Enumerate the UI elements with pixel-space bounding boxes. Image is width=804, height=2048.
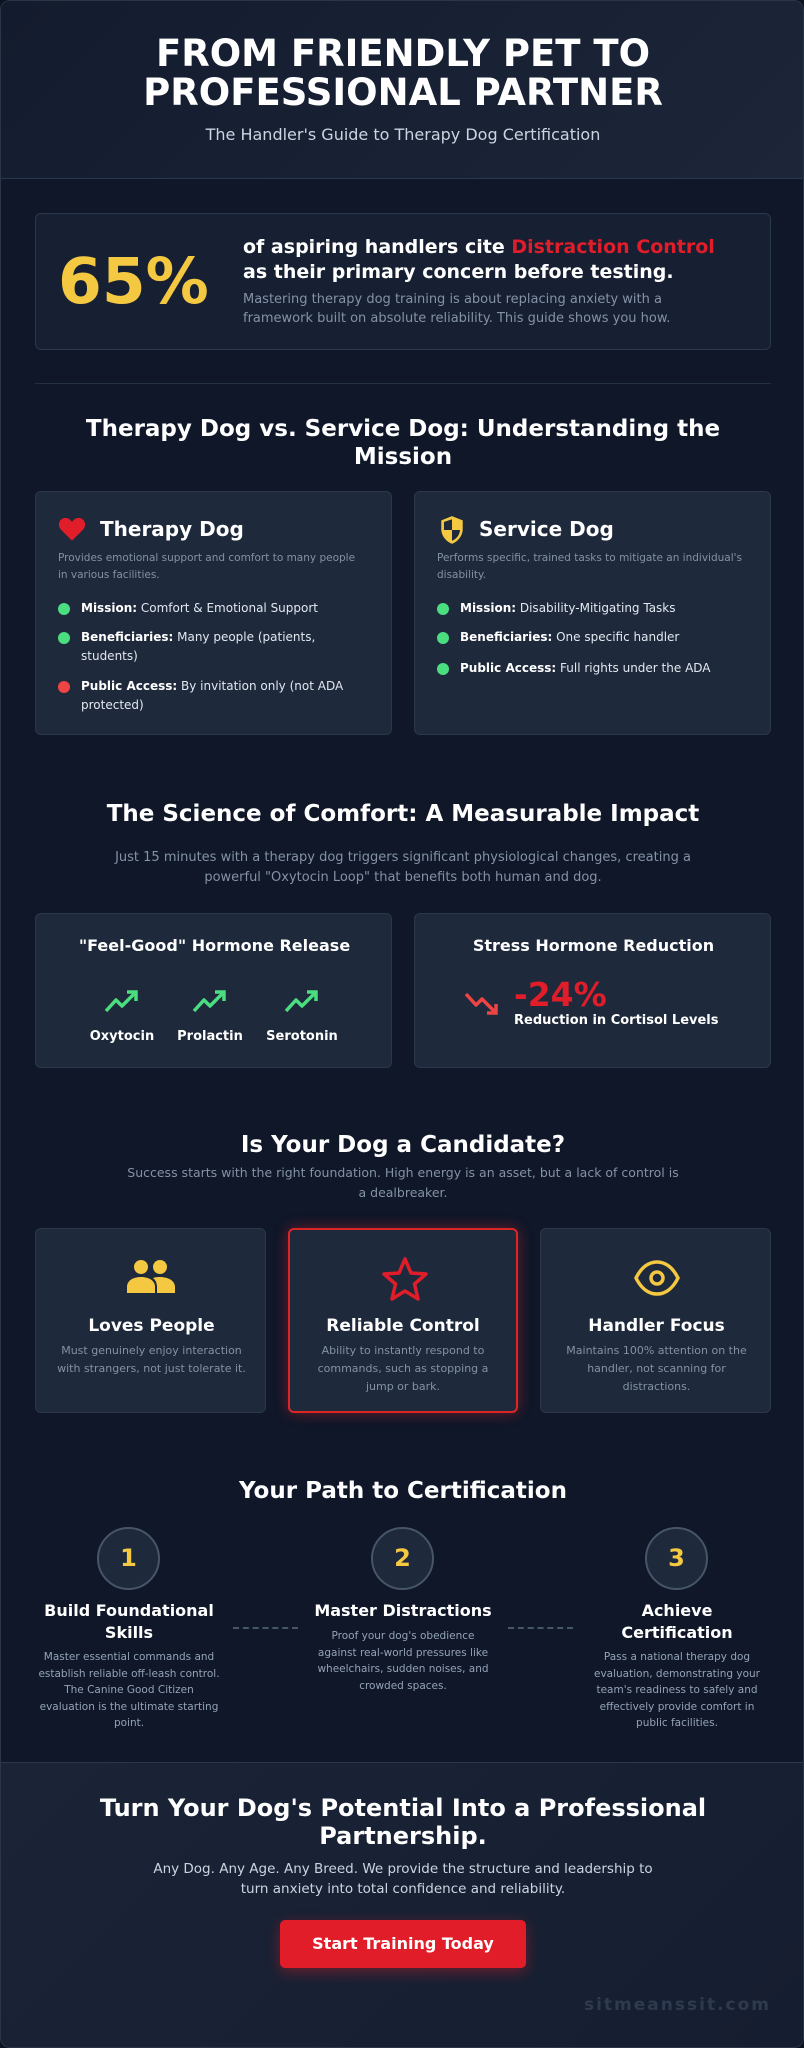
CTA section (1, 1762, 804, 2048)
title: Handler Focus (588, 1316, 725, 1336)
icon: shield (441, 516, 463, 544)
description: Must genuinely enjoy interaction with strangers, not just tolerate it. (57, 1344, 246, 1375)
stat text: of aspiring handlers cite Distraction Control (243, 236, 715, 258)
card: loves people (35, 1228, 266, 1413)
step title: Master Distractions (314, 1601, 492, 1620)
step 1 (38, 1527, 220, 1729)
hormone: serotonin (266, 990, 338, 1044)
stat text: framework built on absolute reliability. This guide shows you how. (243, 311, 670, 326)
step number (645, 1527, 708, 1590)
hormone: serotonin: Serotonin (266, 1029, 338, 1044)
hormone: prolactin: Prolactin (177, 1029, 243, 1044)
card: handler focus (540, 1228, 771, 1413)
heading: Therapy Dog (100, 517, 244, 541)
section title: candidate: Is Your Dog a Candidate? (241, 1132, 565, 1158)
panel: stress reduction (414, 913, 771, 1068)
icon: down trend (464, 992, 498, 1015)
list item: Mission: Comfort & Emotional Support (81, 601, 318, 615)
panel title: "Feel-Good" Hormone Release (79, 936, 350, 955)
stat label: Reduction in Cortisol Levels (514, 1013, 719, 1028)
CTA button (280, 1920, 526, 1968)
CTA title: Turn Your Dog's Potential Into a Professional Partnership. (100, 1794, 706, 1850)
hormone: prolactin (177, 990, 243, 1044)
stat text (243, 236, 715, 326)
list item: Mission: Disability-Mitigating Tasks (460, 601, 676, 615)
step title: Certification (621, 1623, 733, 1642)
step number (97, 1527, 160, 1590)
connector (233, 1627, 298, 1629)
panel: therapy dog (35, 491, 392, 735)
section title: therapy vs service: Therapy Dog vs. Service Dog: Understanding the Mission (86, 416, 720, 470)
title: Loves People (88, 1316, 215, 1336)
list item: Public Access: By invitation only (not ADA protected) (81, 679, 343, 712)
list item: Beneficiaries: One specific handler (460, 630, 679, 644)
icon: eye (634, 1260, 680, 1296)
science description: Just 15 minutes with a therapy dog triggers significant physiological changes, creating a powerful "Oxytocin Loop" that benefits both human and dog. (115, 850, 691, 884)
candidate description: Success starts with the right foundation. High energy is an asset, but a lack of control is a dealbreaker. (127, 1165, 679, 1200)
description: Ability to instantly respond to commands, such as stopping a jump or bark. (318, 1344, 488, 1393)
panel: service dog (414, 491, 771, 735)
heading: Service Dog (479, 517, 614, 541)
section title: path: Your Path to Certification (239, 1478, 567, 1504)
step desc: Pass a national therapy dog evaluation, demonstrating your team's readiness to safely and effectively provide comfort in public facilities. (594, 1651, 760, 1729)
stat text: Mastering therapy dog training is about replacing anxiety with a (243, 292, 662, 307)
step number: 2 (394, 1544, 411, 1572)
description: Provides emotional support and comfort to many people in various facilities. (58, 552, 355, 581)
step title (621, 1601, 733, 1642)
hormone: oxytocin: Oxytocin (90, 1029, 154, 1044)
subtitle: The Handler's Guide to Therapy Dog Certification (206, 125, 600, 144)
step desc: Master essential commands and establish reliable off-leash control. The Canine Good Citizen evaluation is the ultimate starting point. (38, 1651, 220, 1729)
CTA button: Start Training Today (312, 1934, 494, 1953)
icon: people (127, 1260, 175, 1293)
description: Maintains 100% attention on the handler, not scanning for distractions. (566, 1344, 747, 1393)
step number (371, 1527, 434, 1590)
title: FROM FRIENDLY PET TO (156, 32, 650, 75)
panel: feel-good hormones (35, 913, 392, 1068)
step title: Achieve (642, 1601, 712, 1620)
list item: Public Access: Full rights under the ADA (460, 661, 711, 675)
step number: 3 (668, 1544, 685, 1572)
watermark: sitmeanssit.com (584, 1995, 771, 2015)
card: reliable control (highlighted) (288, 1228, 518, 1413)
icon: heart (59, 518, 85, 540)
title: Reliable Control (326, 1316, 480, 1336)
title: PROFESSIONAL PARTNER (143, 71, 663, 114)
step number: 1 (120, 1544, 137, 1572)
header (1, 1, 804, 179)
icon: star (382, 1257, 428, 1301)
hormone: oxytocin (90, 990, 154, 1044)
section title: science: The Science of Comfort: A Measurable Impact (107, 801, 699, 827)
title (143, 32, 663, 114)
step desc: Proof your dog's obedience against real-world pressures like wheelchairs, sudden noises, and crowded spaces. (317, 1630, 489, 1692)
big stat: 65% (58, 245, 209, 318)
stat text: as their primary concern before testing. (243, 261, 674, 283)
step 3 (594, 1527, 760, 1729)
panel title: Stress Hormone Reduction (473, 936, 714, 955)
connector (508, 1627, 573, 1629)
CTA text: Any Dog. Any Age. Any Breed. We provide the structure and leadership to turn anxiety into total confidence and reliability. (153, 1861, 653, 1896)
step title: Build Foundational Skills (44, 1601, 214, 1642)
list item: Beneficiaries: Many people (patients, students) (81, 630, 315, 663)
step 2 (314, 1527, 492, 1692)
description: Performs specific, trained tasks to mitigate an individual's disability. (437, 552, 742, 581)
stat: -24% (514, 975, 607, 1014)
stat card (35, 213, 771, 350)
